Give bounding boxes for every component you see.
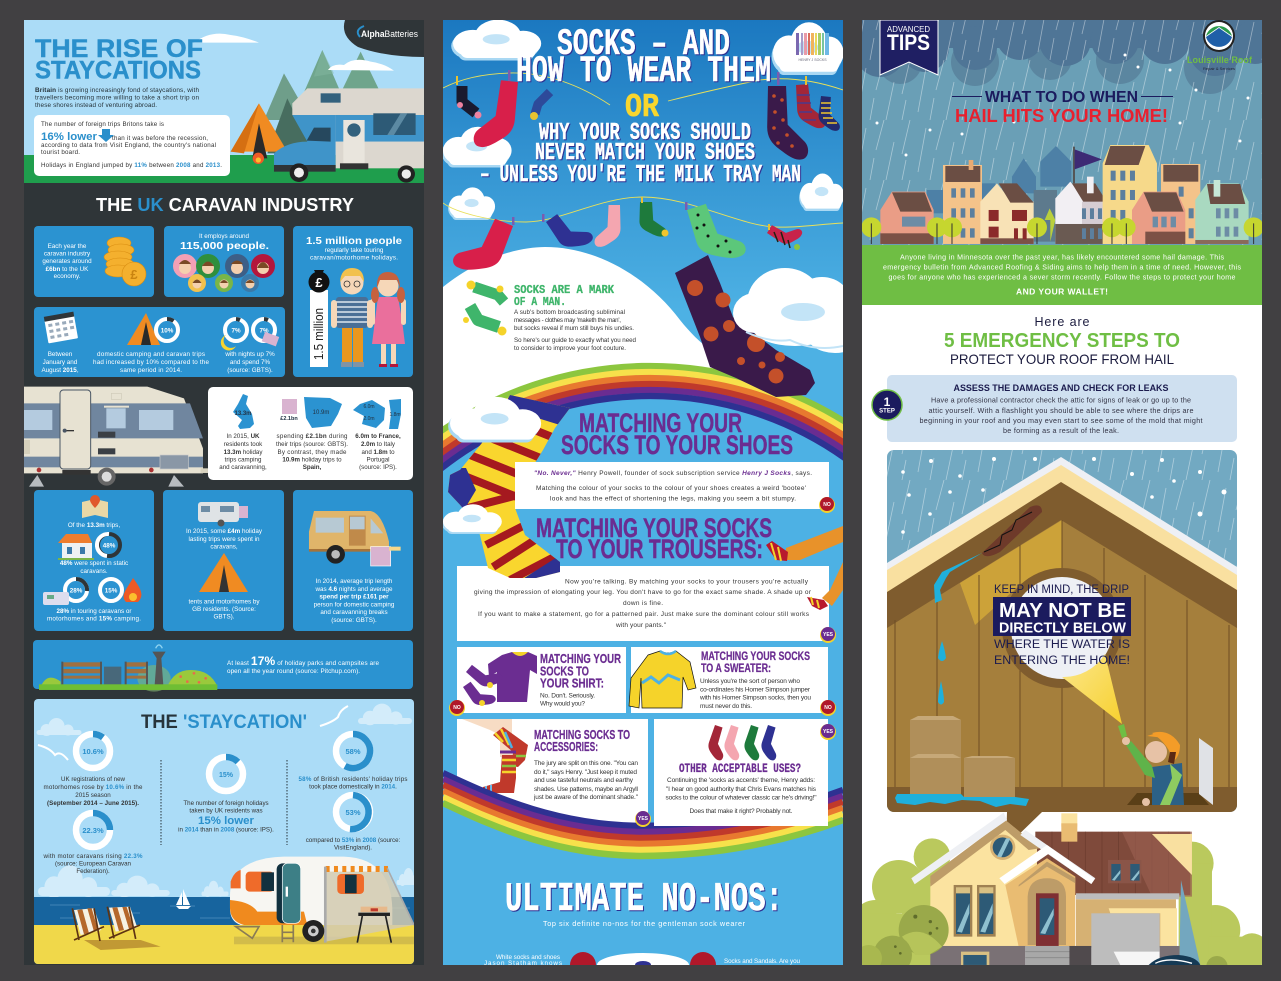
donut: 48% bbox=[97, 534, 120, 556]
card: destinations: 10.9m bbox=[313, 410, 329, 416]
badges: YES bbox=[823, 632, 834, 638]
bar: 1.5 million with money bag: £ bbox=[315, 275, 323, 290]
step 1 box: attic yourself. With a flashlight you should be able to see where the drips are bbox=[928, 406, 1194, 415]
card: holiday parks open all year bbox=[33, 640, 413, 692]
icon: rainbow sock legs bbox=[462, 719, 528, 793]
badges: NO bbox=[453, 705, 461, 711]
white box: socks to trousers: If you want to make a statement, go for a patterned pair. Just make sure the dominant colour still works bbox=[478, 611, 810, 618]
card: £4m holiday trips: GBTS). bbox=[214, 614, 235, 620]
card: £4m holiday trips: GB residents. (Source: bbox=[192, 606, 256, 613]
bar: 1.5 million with money bag: 1.5 million bbox=[311, 308, 326, 360]
bottom teaser: Socks and Sandals. Are you bbox=[724, 958, 800, 965]
white box: socks to shirt: SOCKS TO bbox=[540, 664, 589, 678]
card: trip length and spend: In 2014, average trip length bbox=[316, 578, 393, 585]
badge: step 1 bbox=[872, 390, 902, 420]
intro paragraph: Anyone living in Minnesota over the past year, has likely encountered some hail damage. This bbox=[900, 254, 1224, 262]
title: WHY YOUR SOCKS SHOULD bbox=[539, 120, 751, 147]
badges: NO bbox=[824, 705, 832, 711]
white hill bbox=[443, 247, 760, 428]
text: 53%: compared to 53% in 2008 (source: bbox=[306, 837, 401, 844]
card: destinations: Portugal bbox=[366, 456, 390, 464]
pegs bbox=[456, 76, 807, 230]
icon: green socks bbox=[463, 280, 506, 336]
donut: 28% with caravan: 28% bbox=[70, 588, 83, 594]
card: 13.3m trips breakdown: motorhomes and 15% camping. bbox=[47, 616, 141, 622]
card: £4m holiday trips bbox=[163, 490, 284, 631]
white box: socks to shirt: YOUR SHIRT: bbox=[540, 676, 604, 690]
title: – UNLESS YOU'RE THE MILK TRAY MAN bbox=[480, 162, 801, 189]
bottom mask bbox=[0, 965, 1281, 981]
text: 53%: VisitEngland). bbox=[334, 844, 372, 852]
white box: socks to trousers: down is fine. bbox=[623, 600, 663, 607]
heading: 5 emergency steps: PROTECT YOUR ROOF FROM HAIL bbox=[950, 351, 1174, 367]
text: 15% lower: The number of foreign holidays bbox=[183, 800, 269, 807]
map: Spain bbox=[304, 397, 342, 428]
text: motor caravans: Federation). bbox=[76, 868, 110, 875]
white box: socks to accessories: do it," says Henry. "Just keep it muted bbox=[534, 769, 637, 776]
white box: socks to shirt: MATCHING YOUR bbox=[540, 652, 621, 666]
white box: other acceptable uses: Continuing the 'socks as accents' theme, Henry adds: bbox=[667, 777, 815, 784]
card: 1.5 million people: regularly take touring bbox=[325, 247, 384, 254]
callout: 16% lower bbox=[34, 115, 230, 176]
money: £2.1bn bbox=[280, 399, 298, 420]
text: socks are a mark of a man: So here's our guide to exactly what you need bbox=[514, 337, 637, 344]
card: destinations: By contrast, they made bbox=[278, 449, 347, 456]
figure: woman bbox=[370, 272, 406, 367]
subheading: Top six definite no-nos for the gentleman sock wearer bbox=[543, 919, 746, 928]
logo: Alpha Batteries: AlphaBatteries bbox=[361, 29, 418, 39]
big polka dot sock bbox=[675, 255, 815, 397]
card: destinations: 6.0m bbox=[363, 404, 375, 410]
heading: 5 emergency steps: Here are bbox=[1034, 315, 1090, 329]
callout: 16% lower: 16% lower bbox=[41, 131, 98, 143]
orange trousers legs bbox=[766, 526, 843, 610]
heading: 5 emergency steps bbox=[944, 315, 1180, 367]
clouds bbox=[442, 20, 844, 220]
card: destinations bbox=[208, 387, 413, 480]
heading: matching your socks to your trousers: TO YOUR TROUSERS: bbox=[556, 534, 763, 564]
white box: other acceptable uses: socks to the colour of whatever classic car he's driving!" bbox=[666, 794, 817, 802]
worker with flashlight bbox=[1118, 724, 1213, 806]
intro text bbox=[35, 87, 199, 109]
title: THE RISE OF bbox=[35, 35, 203, 63]
white box: other acceptable uses bbox=[654, 719, 828, 826]
donut: 22.3%: 22.3% bbox=[82, 826, 104, 835]
logo: barcode: HENRY J SOCKS bbox=[798, 58, 827, 62]
donut: 15%: 15% bbox=[219, 772, 234, 779]
card: destinations: In 2015, UK bbox=[226, 433, 260, 440]
callout tail bbox=[1006, 812, 1042, 847]
step 1 box: Have a professional contractor check the attic for signs of leak or go up to the bbox=[931, 396, 1191, 404]
donut: 53% bbox=[336, 795, 370, 829]
card: destinations: and caravanning, bbox=[219, 464, 267, 471]
intro text: these shores instead of venturing abroad. bbox=[35, 102, 157, 109]
white box: socks to sweater: TO A SWEATER: bbox=[701, 661, 771, 675]
logo: Louisville Roof bbox=[1187, 20, 1253, 71]
green band bbox=[862, 245, 1262, 305]
card: £4m holiday trips: lasting trips were spent in bbox=[188, 536, 260, 543]
icon: yellow sweater bbox=[629, 651, 696, 708]
card: £4m holiday trips: In 2015, some £4m holiday bbox=[186, 528, 263, 535]
donut: 10.6%: 10.6% bbox=[82, 747, 104, 756]
card: domestic camping growth: and spend 7% bbox=[230, 359, 271, 366]
money: £2.1bn: £2.1bn bbox=[280, 416, 298, 422]
donuts: 7% nights and spend: 7% bbox=[259, 328, 269, 334]
heading: the staycation: THE 'STAYCATION' bbox=[141, 712, 307, 733]
white box: socks to shoes bbox=[515, 462, 829, 509]
white box: socks to sweater: Unless you're the sort of person who bbox=[700, 678, 800, 685]
illustration: house bbox=[852, 813, 1269, 977]
logo: Alpha Batteries bbox=[344, 20, 424, 57]
donut: 28% with caravan bbox=[43, 579, 87, 605]
heading: matching your socks to your trousers: MATCHING YOUR SOCKS bbox=[536, 513, 772, 543]
white box: socks to sweater: MATCHING YOUR SOCKS bbox=[701, 649, 810, 663]
panel: socks bbox=[440, 20, 865, 967]
icon: purple tshirt and socks bbox=[463, 652, 537, 712]
icon: camper van bbox=[309, 511, 401, 566]
text: keep in mind bbox=[993, 584, 1131, 667]
donut: 22.3% bbox=[76, 813, 110, 847]
text: motor caravans bbox=[42, 853, 143, 875]
step 1 box: beginning in your roof and you may even start to see some of the mold that might bbox=[920, 416, 1202, 425]
card: domestic camping growth: August 2015, bbox=[41, 367, 79, 374]
sailboat bbox=[176, 889, 191, 909]
white box: other acceptable uses: "I hear on good authority that Chris Evans matches his bbox=[666, 786, 817, 793]
card: destinations: their trips (source: GBTS). bbox=[276, 441, 348, 448]
text: no never: Matching the colour of your socks to the colour of your shoes creates a weird 'bootee' bbox=[536, 485, 806, 492]
badge: step 1: 1 bbox=[884, 395, 891, 409]
badges: YES bbox=[638, 816, 649, 822]
heading: matching your socks to your shoes bbox=[561, 408, 793, 460]
title: WHAT TO DO WHEN bbox=[985, 89, 1138, 106]
rainbow arc bbox=[440, 366, 846, 469]
step 1 box: be forming as a result of the leak. bbox=[1003, 426, 1119, 435]
intro text: travellers becoming more willing to take a short trip on bbox=[35, 94, 199, 102]
map: UK bbox=[233, 394, 254, 429]
card: domestic camping growth: same period in 2014. bbox=[120, 367, 182, 374]
white box: socks to accessories: just be aware of the dominant shade." bbox=[533, 794, 639, 801]
card: trip length and spend: spend per trip £161 per bbox=[319, 594, 389, 600]
white box: socks to shirt bbox=[457, 647, 626, 713]
card: 1.5 million people bbox=[293, 226, 413, 377]
intro paragraph: AND YOUR WALLET! bbox=[1016, 286, 1108, 296]
donut: 48%: 48% bbox=[103, 542, 116, 550]
card: domestic camping growth bbox=[34, 307, 285, 377]
card: 13.3m trips breakdown: 28% in touring caravans or bbox=[57, 608, 131, 615]
card: destinations: 2.0m bbox=[363, 416, 375, 422]
donut: 58%: 58% bbox=[345, 747, 361, 756]
callout: 16% lower: than it was before the recession, bbox=[112, 135, 208, 142]
text: 58% bbox=[298, 776, 408, 790]
card: destinations: 1.8m bbox=[389, 412, 401, 418]
flashlight beam bbox=[1062, 654, 1122, 724]
badge: advanced tips: TIPS bbox=[887, 30, 930, 55]
card: domestic camping growth: domestic camping and caravan trips bbox=[97, 351, 205, 358]
card: trip length and spend: (source: GBTS). bbox=[331, 617, 377, 624]
donuts: 7% nights and spend bbox=[221, 319, 279, 350]
text: no never: "No. Never," Henry Powell, founder of sock subscription service Henry J Socks, says. bbox=[534, 470, 812, 477]
text: socks are a mark of a man: A sub's bottom broadcasting subliminal bbox=[514, 309, 625, 316]
white box: socks to shirt: Why would you? bbox=[540, 700, 585, 708]
header scene: campsite illustration bbox=[24, 20, 424, 183]
callout: 16% lower: tourist board. bbox=[41, 149, 80, 156]
card: destinations: (source: IPS). bbox=[359, 464, 397, 471]
card: trip length and spend bbox=[293, 490, 413, 631]
striped sock bbox=[440, 390, 575, 585]
park scene with benches and fountain bbox=[39, 645, 217, 692]
bottom teaser bbox=[484, 952, 800, 967]
icon: house bbox=[58, 534, 94, 560]
illustration: street of houses bbox=[861, 145, 1264, 244]
donut: 58% bbox=[336, 734, 370, 768]
white box: socks to trousers bbox=[457, 566, 829, 641]
title: SOCKS – AND bbox=[557, 24, 730, 66]
text: keep in mind: WHERE THE WATER IS bbox=[994, 639, 1130, 651]
text: keep in mind: DIRECTLY BELOW bbox=[999, 620, 1126, 636]
badges bbox=[449, 497, 836, 827]
icon: map pin bbox=[82, 495, 108, 518]
card: holiday parks open all year: At least 17% of holiday parks and campsites are bbox=[227, 654, 379, 668]
illustration: large caravan bbox=[24, 387, 208, 487]
text: motor caravans: (source: European Caravan bbox=[55, 860, 132, 868]
badges: NO bbox=[823, 502, 831, 508]
text: 15% lower: taken by UK residents was bbox=[189, 808, 263, 814]
text: socks are a mark of a man: to consider to improve your foot couture. bbox=[514, 345, 626, 352]
card: 115,000 people: It employs around bbox=[199, 233, 250, 240]
heading: OR: OR bbox=[625, 89, 659, 126]
callout: 16% lower: according to data from Visit England, the country's national bbox=[41, 142, 216, 149]
card: destinations: 13.3m bbox=[234, 411, 252, 417]
card: 1.5 million people: 1.5 million people bbox=[306, 235, 402, 247]
panel: rise of staycations bbox=[24, 20, 424, 965]
card: £6bn economy: Each year the bbox=[48, 243, 87, 250]
wall planks bbox=[895, 520, 1229, 787]
card: destinations: 13.3m holiday bbox=[224, 449, 263, 456]
card: domestic camping growth: (source: GBTS). bbox=[227, 367, 273, 374]
card: domestic camping growth: January and bbox=[43, 359, 78, 366]
white box: socks to accessories bbox=[457, 719, 648, 826]
heading: UK caravan industry: THE UK CARAVAN INDUSTRY bbox=[96, 195, 354, 215]
boxes bbox=[910, 716, 1015, 797]
text: motor caravans: with motor caravans rising 22.3% bbox=[42, 853, 143, 860]
text: socks are a mark of a man bbox=[514, 284, 637, 352]
badge: step 1: STEP bbox=[879, 408, 895, 414]
card: destinations: trips camping bbox=[225, 456, 262, 464]
seagulls bbox=[38, 706, 348, 760]
text: keep in mind: ENTERING THE HOME! bbox=[994, 655, 1130, 667]
card: destinations: 10.9m holiday trips to bbox=[282, 456, 342, 464]
card: 115,000 people bbox=[164, 226, 284, 297]
white box: socks to trousers: giving the impression of elongating your leg. You don't have to go for the exact same shade. A shade up or bbox=[474, 589, 812, 596]
card: £4m holiday trips: caravans, bbox=[210, 544, 238, 550]
logo: Louisville Roof: Repair & Services bbox=[1203, 66, 1235, 71]
heading: 5 emergency steps: 5 EMERGENCY STEPS TO bbox=[944, 330, 1180, 352]
heading: matching your socks to your shoes: SOCKS TO YOUR SHOES bbox=[561, 430, 793, 460]
text: 15% lower bbox=[178, 800, 274, 834]
storm clouds bbox=[855, 12, 1277, 94]
icon: tent bbox=[199, 553, 248, 592]
title: HOW TO WEAR THEM bbox=[516, 51, 771, 93]
text: 53% bbox=[306, 837, 401, 852]
card: £6bn economy: caravan industry bbox=[44, 250, 91, 258]
card: domestic camping growth: had increased by 10% compared to the bbox=[93, 359, 209, 366]
text: socks are a mark of a man: messages - clothes may 'maketh the man', bbox=[514, 317, 621, 324]
white box: socks to accessories: and use tasteful neutrals and earthy bbox=[534, 777, 634, 784]
text: no never bbox=[534, 470, 812, 502]
card: destinations: spending £2.1bn during bbox=[276, 433, 348, 440]
title: HAIL HITS YOUR HOME! bbox=[955, 106, 1168, 126]
card: domestic camping growth: Between bbox=[48, 351, 73, 358]
map: Portugal bbox=[389, 399, 401, 429]
title: STAYCATIONS bbox=[35, 56, 201, 84]
card: destinations: 6.0m to France, bbox=[355, 433, 401, 440]
white box: socks to sweater: with his Homer Simpson socks, then you bbox=[699, 694, 811, 702]
white box: socks to accessories: ACCESSORIES: bbox=[534, 740, 598, 754]
attic floor bbox=[887, 787, 1237, 812]
donut: 53%: 53% bbox=[345, 808, 361, 817]
white box: socks to sweater: must never do this. bbox=[700, 703, 752, 710]
title bbox=[480, 24, 801, 189]
clothesline lower bbox=[443, 197, 843, 227]
icon: tent with 10% donut bbox=[127, 313, 178, 345]
text: 58%: took place domestically in 2014. bbox=[309, 784, 397, 790]
card: 13.3m trips breakdown: caravans. bbox=[80, 568, 108, 575]
intro paragraph: emergency bulletin from Advanced Roofing & Siding aims to help them in a time of need. However, this bbox=[883, 264, 1241, 272]
deck chairs bbox=[72, 907, 161, 950]
icon: calendar bbox=[44, 312, 78, 343]
step 1 box: ASSESS THE DAMAGES AND CHECK FOR LEAKS bbox=[954, 383, 1168, 394]
badge: advanced tips: ADVANCED bbox=[887, 25, 930, 34]
text: registrations: (September 2014 – June 2015). bbox=[47, 800, 139, 807]
step 1 box bbox=[872, 375, 1237, 442]
text: keep in mind: MAY NOT BE bbox=[999, 600, 1126, 622]
title bbox=[35, 39, 202, 79]
text: socks are a mark of a man: but socks reveal if mum still buys his undies. bbox=[514, 325, 634, 332]
intro text: Britain is growing increasingly fond of staycations, with bbox=[35, 87, 199, 94]
card: destinations: 2.0m to Italy bbox=[361, 441, 396, 448]
socks hanging bbox=[451, 78, 843, 281]
text: registrations: UK registrations of new bbox=[61, 776, 126, 783]
clothesline top bbox=[443, 73, 843, 105]
white box: other acceptable uses: Does that make it right? Probably not. bbox=[690, 808, 793, 815]
card: 13.3m trips breakdown bbox=[34, 490, 154, 631]
round window bbox=[1002, 568, 1122, 688]
map: France bbox=[353, 400, 385, 428]
figure: man bbox=[331, 268, 373, 367]
retro caravan with awning bbox=[230, 857, 414, 944]
rain bbox=[862, 20, 1262, 248]
donut: 10.6% bbox=[76, 734, 110, 768]
card: £6bn economy: £ bbox=[130, 267, 138, 282]
heading: ultimate no-nos: ULTIMATE NO-NOS: bbox=[505, 877, 783, 923]
card: 13.3m trips breakdown: Of the 13.3m trips, bbox=[68, 522, 120, 529]
water puddle bbox=[895, 794, 1029, 807]
card: trip length and spend: and caravanning breaks bbox=[320, 609, 388, 616]
donut: 15% with fire bbox=[100, 578, 141, 602]
callout: 16% lower: The number of foreign trips Britons take is bbox=[41, 121, 164, 128]
text: 58%: 58% of British residents' holiday trips bbox=[298, 776, 408, 783]
card: £6bn economy bbox=[34, 226, 154, 297]
card: 1.5 million people: caravan/motorhome holidays. bbox=[310, 254, 398, 262]
hailstones bbox=[876, 54, 1250, 156]
donut: 15% with fire: 15% bbox=[105, 588, 118, 594]
text: registrations: 2015 season bbox=[75, 792, 111, 799]
intro paragraph: goes for anyone who has experienced a sever storm recently. Follow the steps to protect your home bbox=[888, 274, 1236, 282]
bottom teaser: White socks and shoes bbox=[496, 954, 560, 961]
card: domestic camping growth: with nights up 7% bbox=[224, 351, 275, 358]
heading: matching your socks to your shoes: MATCHING YOUR bbox=[579, 408, 742, 438]
white box: socks to sweater bbox=[629, 647, 828, 713]
bottom teaser: Jason Statham knows bbox=[484, 960, 562, 967]
card: destinations: Spain, bbox=[303, 464, 322, 471]
card: £4m holiday trips: tents and motorhomes by bbox=[188, 598, 260, 606]
logo: Louisville Roof: Louisville Roof bbox=[1187, 55, 1253, 66]
logo: barcode bbox=[796, 33, 829, 62]
panel: hail bbox=[852, 12, 1277, 977]
card: destinations: and 1.8m to bbox=[361, 449, 395, 456]
donuts: 7% nights and spend: 7% bbox=[231, 328, 241, 334]
card: 13.3m trips breakdown: 48% were spent in static bbox=[60, 560, 128, 567]
title: NEVER MATCH YOUR SHOES bbox=[535, 140, 755, 167]
card: trip length and spend: person for domestic camping bbox=[314, 602, 395, 608]
heading: matching your socks to your trousers bbox=[536, 513, 772, 564]
intro paragraph bbox=[883, 254, 1241, 296]
attic illustration bbox=[887, 450, 1237, 812]
icon: tent with 10% donut: 10% bbox=[161, 328, 174, 334]
white box: socks to trousers: Now you're talking. By matching your socks to your trousers you're actually bbox=[565, 578, 809, 586]
white box: socks to accessories: shades. Use patterns, maybe an Argyll bbox=[534, 786, 639, 793]
white box: socks to shirt: No. Don't. Seriously. bbox=[540, 692, 595, 700]
card: holiday parks open all year: open all the year round (source: Pitchup.com). bbox=[227, 668, 360, 675]
text: registrations: motorhomes rose by 10.6% in the bbox=[44, 784, 143, 791]
text: keep in mind: KEEP IN MIND, THE DRIP bbox=[994, 584, 1129, 596]
white box: socks to accessories: MATCHING SOCKS TO bbox=[534, 728, 630, 742]
white box: other acceptable uses: OTHER ACCEPTABLE USES? bbox=[679, 762, 801, 776]
callout: 16% lower: Holidays in England jumped by 11% between 2008 and 2013. bbox=[41, 162, 222, 169]
roof crack and water drip bbox=[934, 505, 1042, 704]
text: registrations bbox=[44, 776, 143, 807]
text: 15% lower: 15% lower bbox=[198, 815, 255, 827]
text: 15% lower: in 2014 than in 2008 (source: IPS). bbox=[178, 826, 274, 834]
badge: advanced tips bbox=[880, 20, 938, 75]
donut: 15% bbox=[209, 757, 243, 791]
white box: socks to sweater: co-ordinates his Homer Simpson jumper bbox=[700, 686, 811, 694]
title bbox=[952, 89, 1173, 126]
text: socks are a mark of a man: OF A MAN. bbox=[514, 296, 566, 309]
text: no never: look and has the effect of shortening the legs, making you seem a bit stumpy. bbox=[550, 496, 796, 502]
panel: the staycation bbox=[34, 699, 424, 964]
card: 115,000 people: 115,000 people. bbox=[180, 240, 269, 252]
small clouds on sock bbox=[442, 397, 541, 534]
wavy rainbow bbox=[443, 773, 843, 856]
card: £6bn economy: generates around bbox=[42, 258, 92, 265]
card: destinations: residents took bbox=[224, 441, 263, 448]
white box: socks to trousers: with your pants." bbox=[615, 622, 667, 629]
card: trip length and spend: was 4.6 nights and average bbox=[314, 586, 393, 593]
text: socks are a mark of a man: SOCKS ARE A MARK bbox=[514, 284, 614, 297]
card: £6bn economy: £6bn to the UK bbox=[46, 266, 89, 273]
card: £6bn economy: economy. bbox=[54, 273, 81, 280]
bar: 1.5 million with money bag bbox=[308, 270, 330, 367]
beach scene bbox=[34, 704, 424, 964]
cloud over sock bbox=[733, 268, 865, 353]
white box: socks to accessories: The jury are split on this one. "You can bbox=[534, 760, 638, 767]
badges: YES bbox=[823, 729, 834, 735]
